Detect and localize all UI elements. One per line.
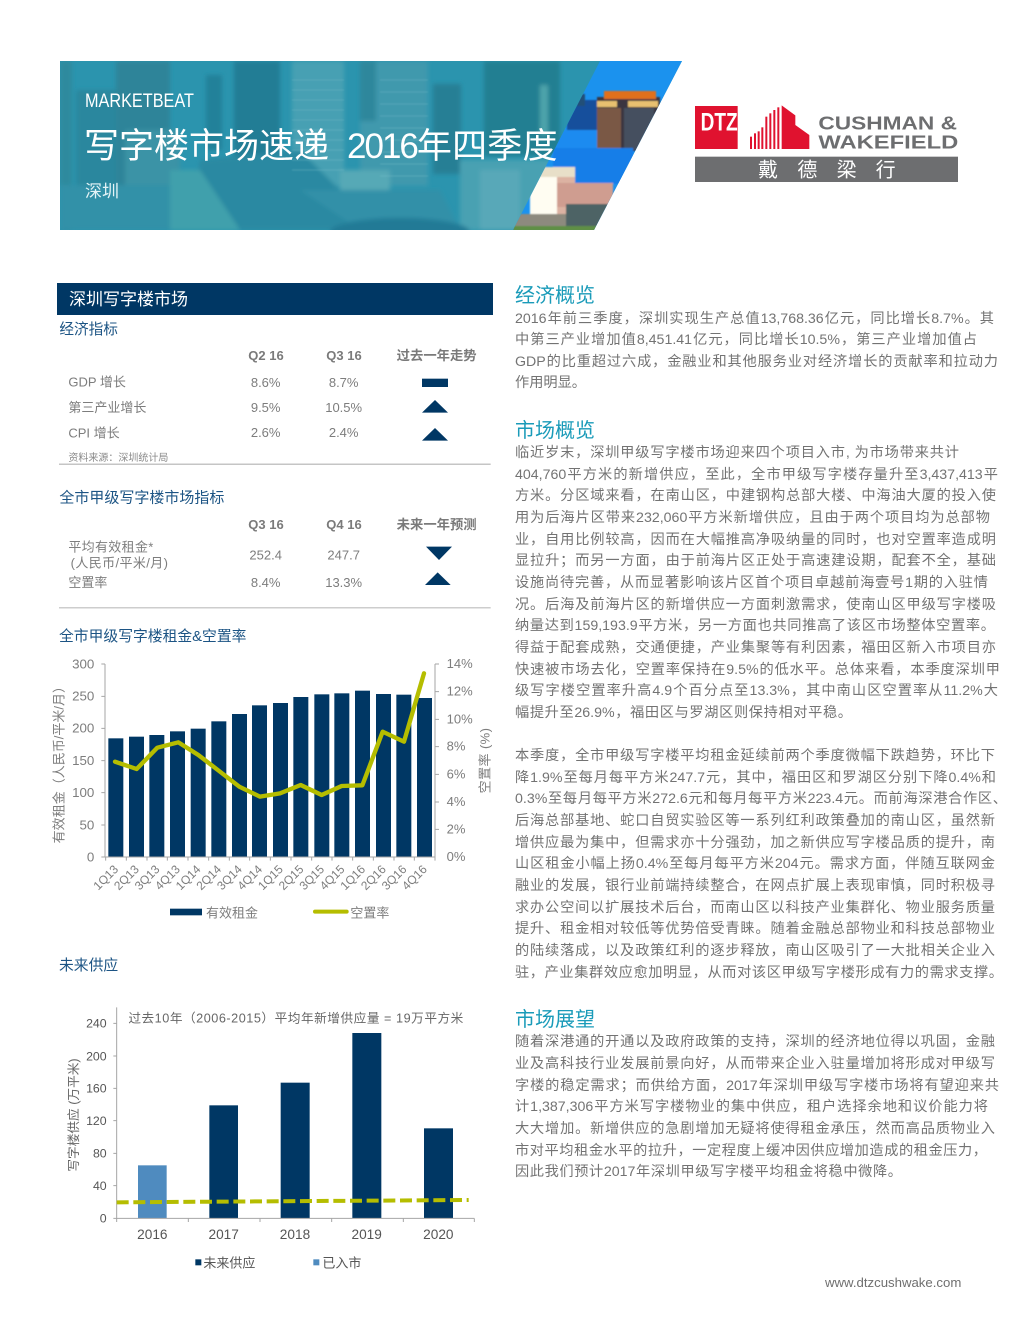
table: grade A office market indicators: Q4 16 — [326, 517, 362, 532]
line: 10-year average supply — [117, 1200, 469, 1202]
banner label: MARKETBEAT: MARKETBEAT — [85, 91, 194, 112]
year labels: 2020 — [423, 1227, 454, 1242]
right axis labels: 14% — [447, 656, 473, 671]
chart: effective rent and vacancy rate — [51, 656, 492, 920]
grey Chinese name band — [695, 157, 958, 182]
left axis labels: 100 — [72, 785, 94, 800]
heading: economic overview: 经济概览 — [515, 285, 595, 307]
table: grade A office market indicators: Q3 16 — [248, 517, 284, 532]
heading: rent and vacancy chart: 全市甲级写字楼租金&空置率 — [59, 629, 246, 645]
quarter labels: 1Q14 — [173, 862, 204, 893]
axes — [101, 664, 439, 861]
heading: market overview: 市场概览 — [515, 420, 595, 442]
panel header: Shenzhen office market — [57, 283, 493, 315]
text block: economic overview: 作用明显。 — [515, 375, 586, 391]
quarter labels: 4Q14 — [234, 862, 265, 893]
right axis labels: 8% — [447, 739, 466, 754]
text block: economic overview: 2016年前三季度，深圳实现生产总值13,768.36亿元，同比增长8.7%。其 — [515, 311, 994, 327]
legend: 未来供应 — [203, 1255, 255, 1270]
wordmark: WAKEFIELD — [818, 131, 958, 152]
quarter labels: 3Q15 — [296, 862, 327, 893]
panel header: Shenzhen office market: 深圳写字楼市场 — [69, 290, 188, 309]
table: grade A office market indicators: 未来一年预测 — [397, 516, 477, 532]
panel: indicator tables — [59, 321, 491, 608]
left axis labels: 250 — [72, 689, 94, 704]
bars: supply by year — [138, 1033, 453, 1218]
text block: market overview — [515, 444, 1000, 721]
text block: economic overview: 中第三产业增加值8,451.41亿元，同比增长10.5%，第三产业增加值占 — [515, 332, 977, 348]
banner city label: 深圳 — [85, 182, 119, 201]
table: economic indicators: 8.6% — [251, 375, 281, 390]
wordmark: CUSHMAN & — [818, 113, 957, 134]
quarter labels: 3Q14 — [214, 862, 245, 893]
y axis labels — [86, 1017, 107, 1226]
text block: market overview: 设施尚待完善，从而显著影响该片区首个项目卓越前海壹号1期的入驻情 — [515, 575, 988, 591]
year labels — [137, 1227, 454, 1242]
text block: market outlook — [515, 1034, 999, 1180]
wordmark — [818, 113, 958, 152]
text block: rent commentary: 本季度，全市甲级写字楼平均租金延续前两个季度微幅下跌趋势，环比下 — [515, 748, 995, 764]
year labels: 2019 — [351, 1227, 382, 1242]
legend — [195, 1255, 361, 1270]
left axis labels: 300 — [72, 656, 94, 671]
left axis labels: 0 — [87, 849, 94, 864]
table: grade A office market indicators — [59, 489, 491, 608]
table: economic indicators: 经济指标 — [59, 321, 118, 338]
quarter labels: 3Q13 — [132, 862, 163, 893]
icon: red building — [750, 105, 809, 149]
footer: website: www.dtzcushwake.com — [825, 1275, 961, 1290]
y axis labels: 200 — [86, 1049, 107, 1063]
legend: 空置率 — [350, 905, 389, 920]
text block: market outlook: 大大增加。新增供应的急剧增加无疑将使得租金承压，然而高品质物业入 — [515, 1121, 995, 1137]
year labels: 2018 — [280, 1227, 310, 1242]
icon: DTZ red square: DTZ — [701, 110, 738, 137]
quarter labels: 1Q13 — [90, 862, 121, 893]
quarter labels: 2Q15 — [276, 862, 307, 893]
text block: rent commentary — [515, 748, 1007, 981]
quarter labels: 1Q15 — [255, 862, 286, 893]
text block: market overview: 方米。分区域来看，在南山区，中建钢构总部大楼、中海油大厦的投入使 — [515, 488, 996, 504]
right axis labels: 12% — [447, 684, 473, 699]
y axis labels: 240 — [86, 1017, 107, 1031]
y axis title: 写字楼供应 (万平米) — [66, 1058, 81, 1172]
left axis labels: 50 — [80, 817, 94, 832]
grey Chinese name band: 德 — [797, 159, 817, 182]
y axis labels: 120 — [86, 1114, 107, 1128]
text block: rent commentary: 后海总部基地、蛇口自贸实验区等一系列红利政策叠加的南山区，虽然新 — [515, 813, 995, 829]
icon: DTZ red square — [695, 106, 738, 149]
right axis labels — [447, 656, 473, 864]
quarter labels: 3Q16 — [379, 862, 410, 893]
quarter labels: 4Q15 — [317, 862, 348, 893]
text block: rent commentary: 增供应最为集中，但需求亦十分强劲，加之新供应写字楼品质的提升，南 — [515, 835, 995, 851]
text block: market overview: 业，自用比例较高，因而在大幅推高净吸纳量的同时，也对空置率造成明 — [515, 532, 996, 548]
text block: rent commentary: 降1.9%至每月每平方米247.7元，其中，福田区和罗湖区分别下降0.4%和 — [515, 770, 996, 786]
logo: DTZ Cushman & Wakefield — [695, 105, 958, 182]
chart: future supply — [66, 1007, 475, 1270]
quarter labels: 4Q13 — [152, 862, 183, 893]
text block: market outlook: 计1,387,306平方米写字楼物业的集中供应，租户选择余地和议价能力将 — [515, 1099, 988, 1115]
y axis labels: 80 — [93, 1147, 107, 1161]
text block: market overview: 显拉升；而另一方面，由于前海片区正处于高速建设期，配套不全，基础 — [515, 553, 996, 569]
y axis labels: 40 — [93, 1179, 107, 1193]
text block: market overview: 临近岁末，深圳甲级写字楼市场迎来四个项目入市, 为市场带来共计 — [515, 445, 959, 461]
text block: market overview: 纳量达到159,193.9平方米，另一方面也共同推高了该区市场整体空置率。 — [515, 618, 995, 634]
table: grade A office market indicators: 8.4% — [251, 575, 281, 590]
quarter labels: 2Q16 — [358, 862, 389, 893]
text block: rent commentary: 的陆续落成，以及政策红利的逐步释放，南山区吸引了一大批相关企业入 — [515, 943, 995, 959]
text block: market outlook: 业及高科技行业发展前景向好，从而带来企业入驻量增加将形成对甲级写 — [515, 1056, 995, 1072]
grey Chinese name band: 戴 — [758, 159, 778, 182]
y axis labels: 160 — [86, 1082, 107, 1096]
quarter labels — [90, 862, 430, 893]
text block: market overview: 幅提升至26.9%，福田区与罗湖区则保持相对平稳。 — [515, 705, 852, 721]
table: economic indicators: GDP 增长 — [68, 375, 126, 390]
table: grade A office market indicators: 247.7 — [327, 547, 360, 562]
text block: market outlook: 字楼的稳定需求；而供给方面，2017年深圳甲级写字楼市场将有望迎来共 — [515, 1078, 999, 1094]
table: economic indicators: 10.5% — [325, 400, 363, 415]
text block: market overview: 用为后海片区带来232,060平方米新增供应，且由于两个项目均为总部物 — [515, 510, 990, 526]
table: grade A office market indicators: 空置率 — [68, 575, 107, 590]
legend: 已入市 — [322, 1255, 361, 1270]
table: economic indicators: 8.7% — [329, 375, 359, 390]
table: economic indicators: CPI 增长 — [68, 426, 120, 441]
axis titles: 空置率 (%) — [477, 728, 492, 793]
heading: future supply: 未来供应 — [59, 958, 118, 974]
text block: market overview: 快速被市场去化，空置率保持在9.5%的低水平。总体来看，本季度深圳甲 — [515, 662, 1000, 678]
heading: market outlook: 市场展望 — [515, 1009, 595, 1031]
text block: market overview: 级写字楼空置率升高4.9个百分点至13.3%，其中南山区空置率从11.2%大 — [515, 683, 998, 699]
text block: economic overview — [515, 310, 998, 391]
y axis labels: 0 — [100, 1212, 107, 1226]
banner photo: teal skyline — [60, 61, 690, 246]
axis titles — [51, 680, 492, 843]
text block: rent commentary: 驻，产业集群效应愈加明显，从而对该区甲级写字楼形成有力的需求支撑。 — [515, 965, 1003, 981]
table: grade A office market indicators: 252.4 — [249, 547, 282, 562]
grey Chinese name band: 梁 — [837, 159, 857, 182]
quarter labels: 2Q14 — [193, 862, 224, 893]
callout: 10-year average: 过去10年（2006-2015）平均年新增供应量 = 19万平方米 — [128, 1010, 464, 1025]
legend: 有效租金 — [206, 905, 258, 920]
table: economic indicators: 过去一年走势 — [397, 347, 477, 363]
year labels: 2016 — [137, 1227, 168, 1242]
table: grade A office market indicators: 13.3% — [325, 575, 363, 590]
table: economic indicators: Q2 16 — [248, 348, 284, 363]
right axis labels: 2% — [447, 821, 466, 836]
text block: market outlook: 因此我们预计2017年深圳甲级写字楼平均租金将稳中微降。 — [515, 1164, 902, 1180]
table: grade A office market indicators: 全市甲级写字楼市场指标 — [59, 489, 224, 507]
text block: rent commentary: 山区租金小幅上扬0.4%至每月每平方米204元。需求方面，伴随互联网金 — [515, 856, 995, 872]
table: economic indicators: 9.5% — [251, 400, 281, 415]
year labels: 2017 — [208, 1227, 239, 1242]
right axis labels: 6% — [447, 766, 466, 781]
banner photo: bright inset buildings — [513, 61, 682, 230]
banner: city skyline header — [60, 61, 682, 230]
table: economic indicators: Q3 16 — [326, 348, 362, 363]
table: economic indicators: 资料来源：深圳统计局 — [68, 451, 168, 464]
table: economic indicators: 2.4% — [329, 425, 359, 440]
text block: rent commentary: 求办公空间以扩展技术后台，而南山区以科技产业集群化、物业服务质量 — [515, 900, 995, 916]
text block: rent commentary: 融业的发展，银行业前端持续整合，在网点扩展上表现审慎，同时积极寻 — [515, 878, 995, 894]
quarter labels: 2Q13 — [111, 862, 142, 893]
text block: market outlook: 市对平均租金水平的拉升，一定程度上缓冲因供应增加造成的租金压力， — [515, 1143, 987, 1159]
right axis labels: 4% — [447, 794, 466, 809]
right axis labels: 0% — [447, 849, 466, 864]
left axis labels — [72, 656, 94, 864]
text block: rent commentary: 提升、租金相对较低等优势倍受青睐。随着金融总部物业和科技总部物业 — [515, 921, 995, 937]
table: grade A office market indicators: 平均有效租金* — [68, 540, 153, 555]
axis titles: 有效租金（人民币/平米/月） — [51, 680, 66, 843]
text block: market overview: 404,760平方米的新增供应，至此，全市甲级写字楼存量升至3,437,413平 — [515, 467, 998, 483]
left axis labels: 150 — [72, 753, 94, 768]
quarter labels: 4Q16 — [399, 862, 430, 893]
quarter labels: 1Q16 — [337, 862, 368, 893]
text block: market outlook: 随着深港通的开通以及政府政策的支持，深圳的经济地位得以巩固，金融 — [515, 1034, 995, 1050]
left axis labels: 200 — [72, 721, 94, 736]
table: economic indicators: 2.6% — [251, 425, 281, 440]
table: economic indicators: 第三产业增长 — [68, 400, 146, 415]
text block: economic overview: GDP的比重超过六成，金融业和其他服务业对经济增长的贡献率和拉动力 — [515, 354, 998, 370]
bars: effective rent — [108, 691, 432, 857]
text block: market overview: 得益于配套成熟，交通便捷，产业集聚等有利因素，福田区新入市项目亦 — [515, 640, 996, 656]
text block: market overview: 况。后海及前海片区的新增供应一方面刺激需求，使南山区甲级写字楼吸 — [515, 597, 996, 613]
table: grade A office market indicators: (人民币/平米/月) — [71, 556, 168, 571]
table: economic indicators — [59, 321, 491, 465]
banner title: 写字楼市场速递 2016年四季度 — [84, 127, 558, 166]
axes — [113, 1007, 474, 1222]
text block: rent commentary: 0.3%至每月每平方米272.6元和每月每平方米223.4元。而前海深港合作区、 — [515, 791, 1007, 807]
right axis labels: 10% — [447, 711, 473, 726]
grey Chinese name band: 行 — [876, 159, 896, 182]
legend — [170, 905, 389, 920]
line: vacancy rate — [115, 673, 424, 797]
